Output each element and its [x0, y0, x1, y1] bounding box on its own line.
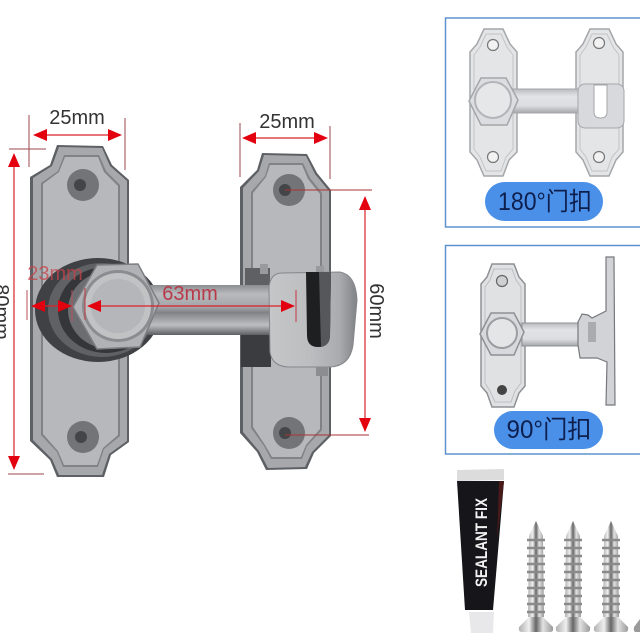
panel: 90 degree latch: [446, 246, 640, 454]
right plate bottom screw hole: [273, 417, 305, 449]
sealant tube: [457, 469, 504, 633]
tube cap: [457, 469, 504, 481]
tube crimp: [469, 612, 494, 633]
screw 3: [594, 521, 628, 632]
90 latch bar: [522, 323, 580, 346]
screw 1: [519, 521, 553, 632]
screw 4 head, cropped at edge: [634, 619, 640, 632]
180 latch right plate: [576, 29, 623, 176]
90 latch side plate and bracket: [578, 257, 615, 405]
label pill: 180: [485, 182, 603, 221]
panel: 180 degree latch: [446, 18, 640, 227]
shadow around catch: [241, 268, 271, 367]
right mounting plate: [240, 153, 331, 470]
left mounting plate: [30, 145, 129, 477]
catch hook: [260, 264, 357, 367]
90 latch plate: [481, 264, 525, 407]
dimension: left plate width 25mm: 25mm: [49, 107, 105, 129]
label pill: 90: 90°门扣: [506, 416, 592, 444]
dimension: hole spacing 60mm: 60mm: [365, 283, 387, 339]
dimension: bar reach 63mm: [85, 283, 296, 322]
dimension: left plate width 25mm: [29, 107, 125, 170]
main latch: [30, 145, 357, 477]
dimension: collar 23mm: [27, 263, 83, 322]
hex nut: [73, 264, 159, 349]
label pill: 180: 180°门扣: [498, 188, 592, 216]
latch bar: [145, 285, 270, 335]
dimension: height 80mm: [0, 149, 46, 474]
catch slot: [306, 272, 331, 347]
dimension: right plate width 25mm: [240, 111, 330, 179]
right plate top screw hole: [273, 174, 305, 206]
dimension: bar reach 63mm: 63mm: [162, 283, 218, 305]
dimension: right plate width 25mm: 25mm: [259, 111, 315, 133]
hinge collar: [35, 258, 161, 362]
180 latch catch: [578, 84, 624, 128]
left plate bottom screw hole: [67, 421, 99, 453]
180 latch left plate: [470, 29, 517, 176]
screw 2: [556, 521, 590, 632]
dimension: collar 23mm: 23mm: [27, 263, 83, 285]
left plate top screw hole: [67, 169, 99, 201]
tabs below catch: [316, 367, 328, 376]
90 latch hex nut: [480, 313, 524, 355]
dimension: hole spacing 60mm: [285, 190, 387, 435]
label pill: 90: [494, 411, 603, 449]
tube label: SEALANT FIX: [472, 497, 491, 587]
180 latch hex nut: [469, 78, 518, 125]
tube body: [457, 481, 504, 610]
180 latch bar: [510, 89, 580, 113]
